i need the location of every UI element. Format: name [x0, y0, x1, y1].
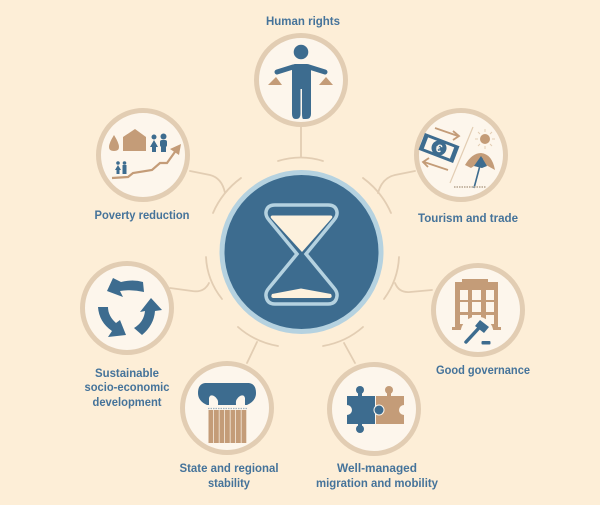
icon: gavel [460, 316, 494, 350]
icon: column shaft [208, 410, 246, 443]
connector: good governance [384, 257, 432, 299]
panel: human rights [256, 14, 346, 124]
label: good governance: Good governance [436, 363, 530, 377]
icon: column capital [198, 383, 256, 408]
label: sustainable development: socio-economic [84, 380, 170, 394]
icon: hourglass outline [266, 205, 337, 304]
label: sustainable development: development [92, 395, 162, 409]
icon: house [123, 129, 146, 151]
label: migration and mobility: migration and mobility [316, 476, 438, 490]
icon: large family [150, 134, 167, 152]
label: state and regional stability: State and regional [180, 461, 278, 475]
icon: hourglass sand bottom [271, 288, 332, 298]
connector: sustainable development [170, 257, 222, 299]
label: sustainable development [84, 366, 170, 409]
panel: migration and mobility [316, 364, 438, 490]
label: state and regional stability: stability [208, 476, 250, 490]
icon: trade arrows [423, 128, 459, 170]
panel: tourism and trade [416, 110, 518, 225]
icon: building [452, 279, 501, 330]
connector: tourism and trade [363, 171, 415, 213]
connector: poverty reduction [190, 171, 241, 213]
icon: euro banknote: € [434, 142, 444, 156]
icon: drop [109, 135, 119, 151]
icon: person with scales [268, 45, 333, 119]
panel: poverty reduction [94, 110, 190, 222]
icon: recycling arrows [98, 278, 162, 337]
connector: migration and mobility [323, 327, 363, 363]
icon: rising arrow [112, 149, 177, 178]
icon: blue puzzle piece [342, 386, 384, 433]
label: poverty reduction: Poverty reduction [94, 208, 190, 222]
label: human rights: Human rights [266, 14, 340, 28]
icon: divider [450, 127, 473, 183]
panel: state and regional stability [180, 364, 278, 490]
central hourglass [222, 172, 381, 332]
icon: small family [115, 161, 126, 174]
connector: human rights [278, 127, 323, 161]
icon: hourglass sand top [271, 216, 332, 252]
label: tourism and trade: Tourism and trade [418, 211, 518, 225]
label: migration and mobility [316, 461, 438, 490]
icon: sun [475, 129, 495, 149]
icon: umbrella [454, 153, 495, 188]
icon: tan puzzle piece [376, 386, 409, 424]
label: migration and mobility: Well-managed [337, 461, 417, 475]
panel: sustainable development [82, 264, 172, 409]
label: sustainable development: Sustainable [95, 366, 159, 380]
connector: state and regional stability [238, 327, 278, 363]
label: state and regional stability [180, 461, 278, 490]
panel: good governance [434, 266, 530, 377]
